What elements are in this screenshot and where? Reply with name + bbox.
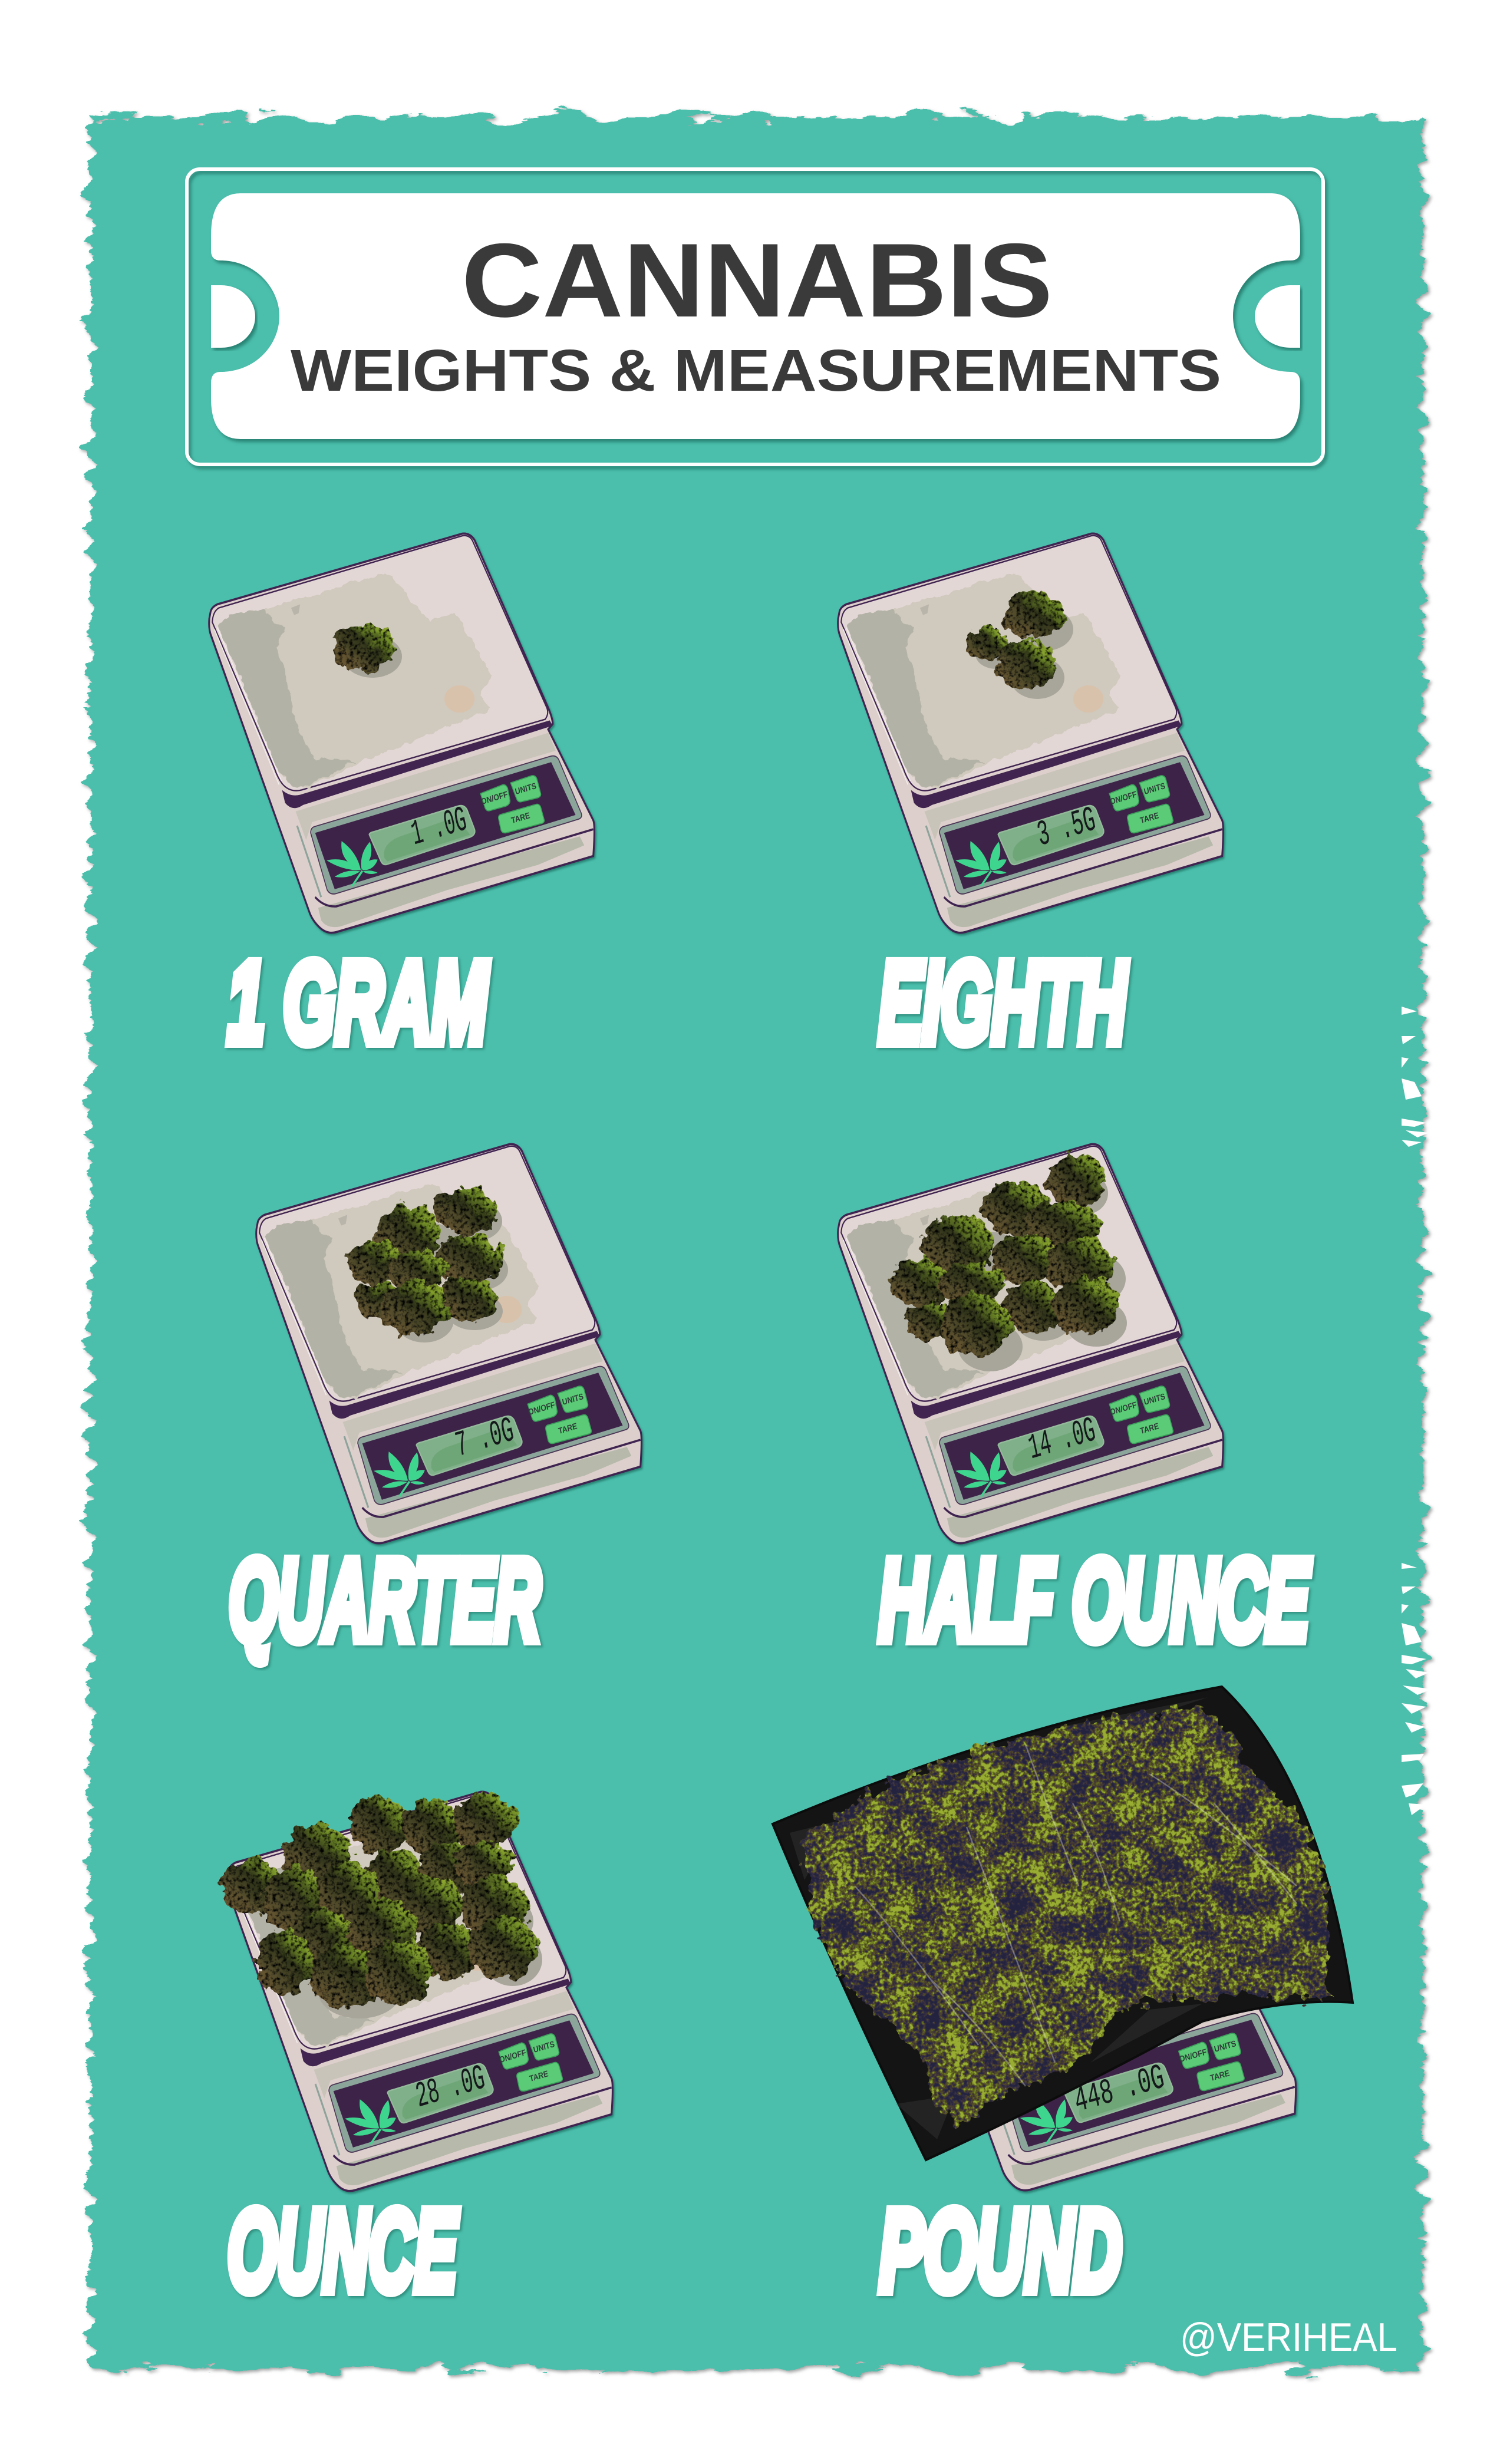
buds: half ounce: [890, 1153, 1127, 1371]
readout 1.0G: 1 .0G: [408, 800, 470, 855]
black bag: [773, 1687, 1353, 2160]
label: 1 gram: 1 GRAM: [228, 938, 489, 1067]
bud mass: [800, 1707, 1330, 2129]
buds: quarter: [346, 1188, 508, 1342]
right notch tab: [1255, 285, 1300, 348]
torn white flecks on right edge: [1402, 1007, 1432, 1815]
plaque outer frame: [187, 169, 1323, 464]
scale: pound: [899, 1791, 1296, 2191]
credit: @VERIHEAL: @VERIHEAL: [1180, 2315, 1397, 2360]
scale: quarter: [256, 1144, 641, 1543]
title plaque: [187, 169, 1323, 464]
left notch tab: [211, 285, 255, 348]
readout 28.0G: 28 .0G: [413, 2058, 489, 2117]
label: pound: POUND: [879, 2186, 1122, 2315]
scale: ounce: [228, 1792, 612, 2191]
plastic streaks: [855, 1744, 1297, 2086]
scale: 1 gram: [209, 533, 594, 933]
subtitle: WEIGHTS & MEASUREMENTS: [291, 338, 1221, 404]
plaque ticket shape: [211, 193, 1300, 439]
scale: eighth: [838, 533, 1223, 933]
readout 14.0G: 14 .0G: [1025, 1410, 1099, 1469]
readout 7.0G: 7 .0G: [452, 1410, 517, 1466]
buds: eighth: [964, 592, 1073, 699]
plastic bag of buds: [773, 1687, 1353, 2160]
title: Cannabis: CANNABIS: [461, 222, 1053, 339]
label: eighth: EIGHTH: [879, 938, 1127, 1067]
buds: ounce: [223, 1793, 542, 2018]
readout 3.5G: 3 .5G: [1034, 800, 1099, 856]
readout 448.0G: 448 .0G: [1071, 2058, 1168, 2123]
label: ounce: OUNCE: [228, 2186, 459, 2315]
bud: 1 gram: [332, 624, 402, 678]
scale: half ounce: [838, 1144, 1223, 1543]
bag sheen: [790, 1697, 1208, 2139]
label: quarter: QUARTER: [229, 1536, 540, 1664]
